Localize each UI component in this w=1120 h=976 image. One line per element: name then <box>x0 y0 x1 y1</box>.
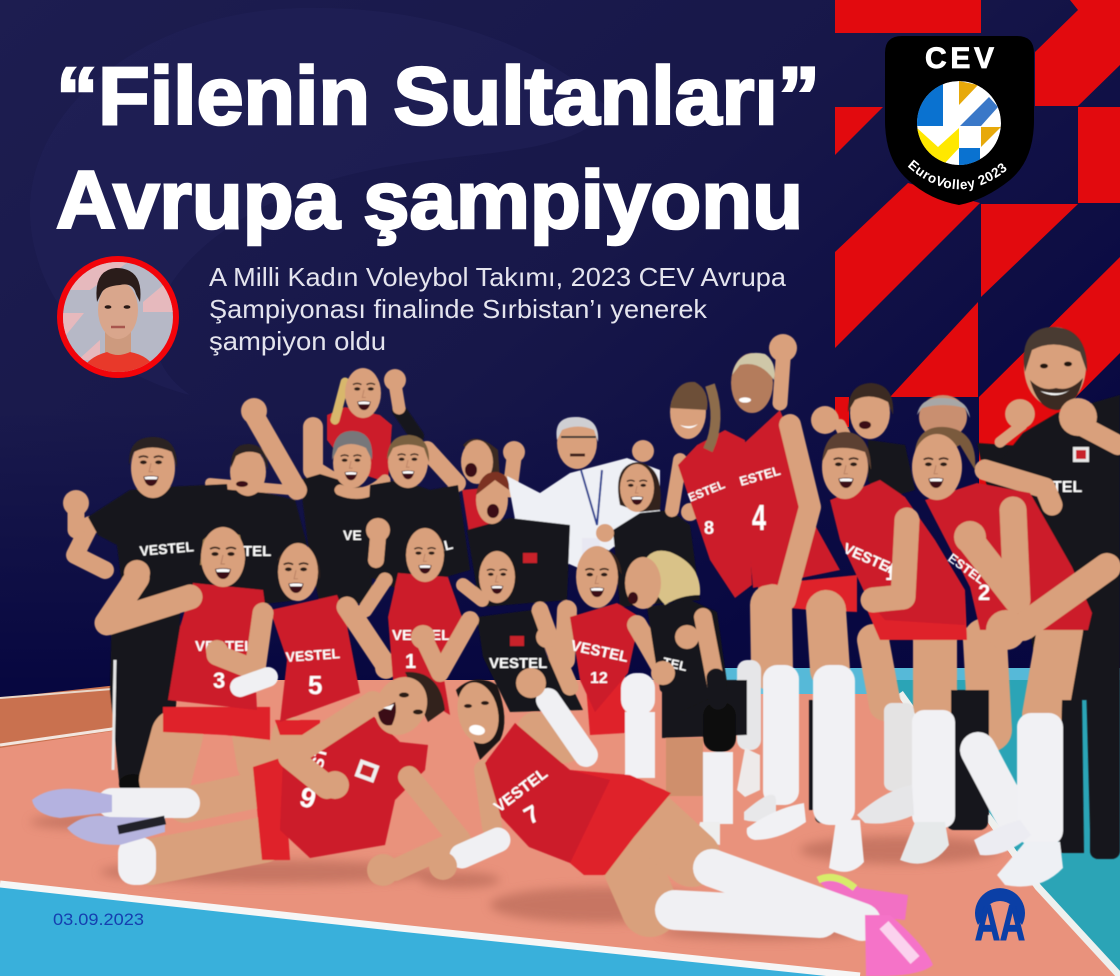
player 1 <box>365 528 482 715</box>
subtitle text: Şampiyonası finalinde Sırbistan’ı yenerek <box>209 294 708 324</box>
title: “Filenin Sultanları” <box>56 51 820 142</box>
woman in black polo <box>596 462 700 607</box>
lying player number 9 <box>32 668 460 886</box>
tall players back right <box>670 334 1120 730</box>
player 8: 8 <box>704 518 714 538</box>
player A number 12 <box>822 432 967 640</box>
subtitle text: şampiyon oldu <box>209 326 386 356</box>
AA logo: AA <box>975 895 1025 951</box>
legs of player 3 <box>165 735 290 780</box>
second pink shoe <box>818 876 908 920</box>
player A number 12: 12 <box>885 563 907 585</box>
staff woman raised fist and jersey <box>313 368 417 493</box>
staff coach right grey-haired <box>917 395 1060 500</box>
EuroVolley emblem <box>917 81 1001 166</box>
lying player number 9: ST <box>308 745 332 771</box>
team photo <box>32 327 1120 976</box>
player B number 2: ESTEL <box>945 550 988 587</box>
red-haired woman in black <box>467 472 570 607</box>
black pants <box>809 640 1120 859</box>
staff coach 2 <box>207 444 307 610</box>
player 12 centre <box>565 546 660 778</box>
shoes <box>737 748 1063 887</box>
player 4: 4 <box>752 497 766 538</box>
player 5 <box>206 543 397 735</box>
lying player number 9: 9 <box>296 781 320 815</box>
player 5: VESTEL <box>285 645 341 665</box>
lying player number 7 <box>429 668 933 976</box>
arm of staff over players <box>985 470 1052 505</box>
player 3 <box>107 527 270 740</box>
left arm and sleeve <box>484 770 492 827</box>
young staff <box>365 435 470 590</box>
young staff: TEL <box>425 536 455 558</box>
staff coach 1 with pants: VESTEL <box>139 538 195 559</box>
background crescent <box>30 8 610 395</box>
subtitle text: A Milli Kadın Voleybol Takımı, 2023 CEV Avrupa <box>209 262 787 292</box>
first leg <box>640 810 692 858</box>
staff coach 2: TEL <box>243 543 271 560</box>
kneeling players legs <box>662 680 747 845</box>
lying player number 7: 7 <box>520 800 545 830</box>
player 4 <box>731 334 857 670</box>
floor shadows <box>30 815 1000 940</box>
first pink shoe <box>865 915 933 976</box>
head <box>456 680 504 760</box>
jersey and shorts <box>570 770 671 875</box>
shorts and jersey <box>253 757 290 860</box>
staff: back row <box>63 327 1120 794</box>
AA logo <box>975 888 1025 951</box>
coach portrait <box>57 256 179 378</box>
player in black centre <box>411 551 583 712</box>
thigh and shoes <box>185 790 257 805</box>
court floor <box>0 668 1120 976</box>
player 1: VESTEL <box>392 627 450 644</box>
CEV EuroVolley logo <box>885 36 1034 205</box>
staff coach grey hair raised arm <box>241 398 385 605</box>
old man in white shirt <box>503 417 660 570</box>
middle row players <box>107 527 728 780</box>
staff coach 1 with pants <box>63 437 240 794</box>
player A number 12: VESTEL <box>840 540 901 579</box>
player 1: 1 <box>405 651 416 673</box>
player 3: 3 <box>213 668 225 693</box>
CEV text: CEV <box>925 42 994 75</box>
head coach on right: TEL <box>1052 479 1082 496</box>
title: Avrupa şampiyonu <box>56 155 803 246</box>
right staff arm <box>986 500 1120 650</box>
player B number 2 <box>912 427 1092 630</box>
player 4: ESTEL <box>738 463 782 489</box>
bun-haired woman <box>427 439 500 540</box>
player 8: ESTEL <box>686 477 727 505</box>
raised arm <box>535 730 565 745</box>
head coach on right <box>985 327 1120 700</box>
player 12 centre: VESTEL <box>569 637 630 666</box>
staff coach grey hair raised arm: VE <box>343 527 362 543</box>
player 8 <box>670 382 752 598</box>
player 5: 5 <box>308 670 322 700</box>
back legs of tall players <box>873 630 1060 730</box>
blonde player in black <box>625 551 728 712</box>
player 12 centre: 12 <box>590 670 608 687</box>
player in black centre: VESTEL <box>489 655 547 672</box>
socks <box>737 660 1063 845</box>
blonde player in black: TEL <box>661 654 689 674</box>
lying player number 7: VESTEL <box>491 765 551 816</box>
subtitle text <box>209 262 787 356</box>
standing legs and shoes <box>662 640 1120 887</box>
title <box>56 51 820 246</box>
young staff behind <box>811 383 915 500</box>
second leg <box>630 862 650 908</box>
player B number 2: 2 <box>978 580 990 605</box>
EuroVolley 2023 text: EuroVolley 2023 <box>908 160 1006 192</box>
player 3: VESTEL <box>195 638 253 655</box>
date: 03.09.2023 <box>53 911 144 929</box>
red geometric pattern <box>835 0 1120 494</box>
